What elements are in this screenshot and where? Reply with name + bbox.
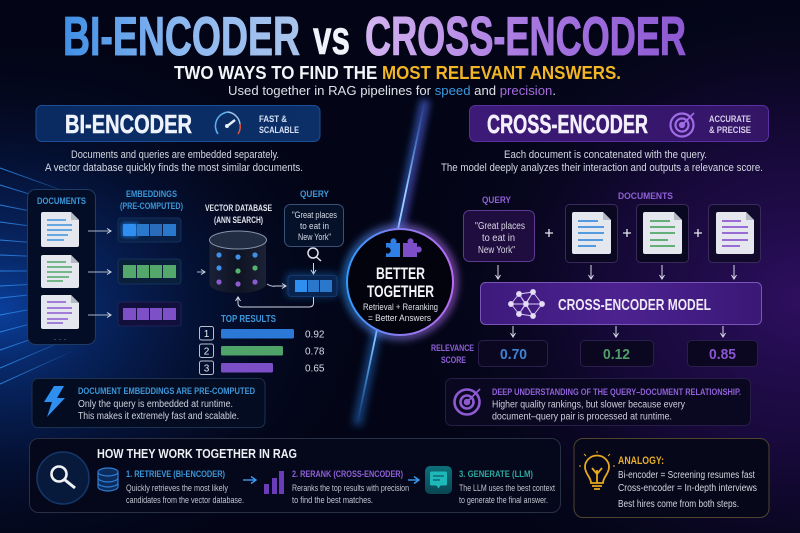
accurate and precise label: ACCURATE: [709, 114, 751, 124]
relevance score label: RELEVANCE: [431, 343, 474, 354]
callout: pre-computed embeddings: [32, 378, 265, 428]
chart: top results: 1: [204, 329, 210, 340]
text: bi-encoder description: Documents and queries are embedded separately.: [71, 149, 279, 161]
arrows: database and query loop: [238, 284, 314, 307]
query box (cross): "Great places: [475, 221, 525, 232]
arrows: documents to embeddings: [88, 231, 111, 315]
document card: purple: [708, 204, 760, 262]
step 2: rerank: [264, 469, 409, 505]
icon: query magnifier: [308, 248, 321, 261]
panel: cross-encoder header: [470, 106, 768, 142]
more documents dots: . . .: [54, 332, 66, 342]
query box: to eat in: [300, 221, 329, 232]
icon: lightning bolt: [44, 386, 65, 417]
panel: cross-encoder model: CROSS-ENCODER MODEL: [558, 297, 711, 314]
badge: better together: TOGETHER: [367, 283, 434, 301]
panel: analogy: ANALOGY:: [618, 455, 664, 467]
embedding: green: [118, 259, 181, 284]
panel: analogy: [574, 438, 769, 518]
arrow: step 2 to 3: [408, 479, 419, 481]
title: BI-ENCODER: [63, 5, 300, 67]
step 3: generate: 3. GENERATE (LLM): [459, 469, 533, 480]
query embedding: [286, 273, 338, 297]
panel: cross-encoder model: [480, 282, 762, 324]
step 2: rerank: Reranks the top results with precision: [292, 483, 409, 493]
step 1: retrieve: Quickly retrieves the most likely: [126, 483, 228, 493]
score: 0.12: 0.12: [603, 346, 630, 363]
heading: HOW THEY WORK TOGETHER IN RAG: [97, 446, 297, 461]
query label (cross): QUERY: [482, 195, 512, 206]
fast and scalable label: FAST &: [259, 114, 287, 124]
vector database label: VECTOR DATABASE: [205, 203, 272, 214]
score: 0.12: [580, 340, 654, 366]
step 2: rerank: 2. RERANK (CROSS-ENCODER): [292, 469, 403, 480]
embedding: purple: [118, 302, 181, 326]
score: 0.70: [478, 340, 548, 366]
plus signs: [545, 229, 702, 237]
panel: analogy: Best hires come from both steps.: [618, 499, 739, 510]
step 1: retrieve: 1. RETRIEVE (BI-ENCODER): [126, 469, 225, 480]
callout: deep understanding: [446, 378, 750, 426]
embeddings label: (PRE-COMPUTED): [120, 201, 183, 212]
step 1: retrieve: candidates from the vector database.: [126, 495, 244, 505]
icon: neural network: [508, 290, 544, 318]
callout: deep understanding: Higher quality rankings, but slower because every: [492, 400, 685, 410]
query box: New York": [298, 232, 331, 243]
icon: green document: [41, 255, 79, 288]
icon: speed gauge: [215, 112, 240, 134]
text: cross-encoder description: The model deeply analyzes their interaction and outputs a relevance score.: [441, 162, 763, 174]
title: vs: [313, 12, 350, 65]
query label: QUERY: [300, 189, 330, 200]
step 2: rerank: to find the best matches.: [292, 495, 373, 505]
chart: top results: [200, 313, 325, 374]
icon: target: [454, 389, 480, 414]
bi-encoder heading: BI-ENCODER: [65, 109, 192, 139]
text: bi-encoder description: [45, 149, 303, 174]
chart: top results: 0.65: [305, 364, 325, 374]
badge: better together: Retrieval + Reranking: [363, 302, 438, 313]
query box (cross): [464, 210, 534, 262]
fast and scalable label: SCALABLE: [259, 125, 299, 135]
documents label: DOCUMENTS: [37, 196, 86, 207]
document card: green: [636, 204, 688, 262]
chart: top results: 3: [204, 364, 210, 374]
text: bi-encoder description: A vector database quickly finds the most similar documents.: [45, 162, 303, 174]
subtitle: TWO WAYS TO FIND THE MOST RELEVANT ANSWERS.: [174, 63, 621, 83]
cross-encoder heading: CROSS-ENCODER: [487, 109, 648, 139]
title: [63, 5, 686, 67]
divider light beam: [357, 100, 426, 425]
panel: bi-encoder header: [36, 106, 320, 142]
accurate and precise label: [709, 114, 751, 135]
relevance score label: SCORE: [441, 355, 466, 366]
icon: purple document: [41, 295, 79, 329]
icon: light bulb: [579, 451, 615, 489]
arrow: step 1 to 2: [243, 479, 256, 481]
panel: analogy: Cross-encoder = In-depth interviews: [618, 483, 757, 494]
fast and scalable label: [259, 114, 299, 135]
document card: blue: [566, 204, 618, 262]
query box: [284, 204, 344, 246]
callout: pre-computed embeddings: DOCUMENT EMBEDDINGS ARE PRE-COMPUTED: [78, 386, 255, 397]
query box (cross): New York": [478, 245, 515, 256]
accurate and precise label: & PRECISE: [709, 125, 751, 135]
icon: puzzle pieces: [386, 238, 422, 257]
icon: vector database cylinder: [210, 231, 266, 293]
chart: top results: 0.78: [305, 346, 325, 358]
text: cross-encoder description: Each document is concatenated with the query.: [504, 149, 707, 161]
callout: deep understanding: document–query pair is processed at runtime.: [492, 412, 672, 422]
embedding: blue: [118, 218, 181, 242]
query box (cross): to eat in: [482, 233, 515, 244]
panel: documents: [28, 190, 96, 344]
chart: top results: 2: [204, 346, 210, 358]
embeddings label: [120, 189, 183, 212]
tagline: Used together in RAG pipelines for speed and precision.: [228, 83, 556, 98]
vector database label: (ANN SEARCH): [214, 215, 263, 226]
arrow: embeddings to database: [197, 271, 205, 273]
badge: better together: [346, 228, 454, 336]
arrow: magnifier to query embedding: [312, 263, 314, 274]
step 1: retrieve: [98, 468, 244, 505]
score: 0.85: 0.85: [709, 346, 736, 363]
step 3: generate: The LLM uses the best context: [459, 483, 555, 493]
icon: blue document: [41, 212, 79, 247]
chart: top results: 0.92: [305, 330, 325, 340]
embeddings label: EMBEDDINGS: [126, 189, 177, 200]
panel: analogy: Bi-encoder = Screening resumes fast: [618, 470, 755, 481]
text: cross-encoder description: [441, 149, 763, 174]
score: 0.85: [688, 340, 758, 366]
icon: target: [670, 113, 694, 136]
chart: top results: TOP RESULTS: [221, 313, 276, 325]
badge: better together: = Better Answers: [368, 313, 431, 324]
panel: how they work together: [30, 438, 560, 512]
score: 0.70: 0.70: [500, 346, 527, 363]
arrows: model to scores: [513, 326, 723, 337]
badge: better together: BETTER: [376, 265, 425, 283]
step 3: generate: to generate the final answer.: [459, 495, 548, 505]
step 3: generate: [425, 466, 555, 505]
arrows: inputs to model: [498, 265, 734, 279]
relevance score label: [431, 343, 474, 366]
callout: pre-computed embeddings: This makes it extremely fast and scalable.: [78, 411, 239, 422]
query box: "Great places: [292, 210, 337, 221]
documents label (cross): DOCUMENTS: [618, 191, 673, 202]
icon: search circle: [37, 452, 89, 504]
callout: pre-computed embeddings: Only the query is embedded at runtime.: [78, 399, 233, 410]
vector database label: [205, 203, 272, 226]
